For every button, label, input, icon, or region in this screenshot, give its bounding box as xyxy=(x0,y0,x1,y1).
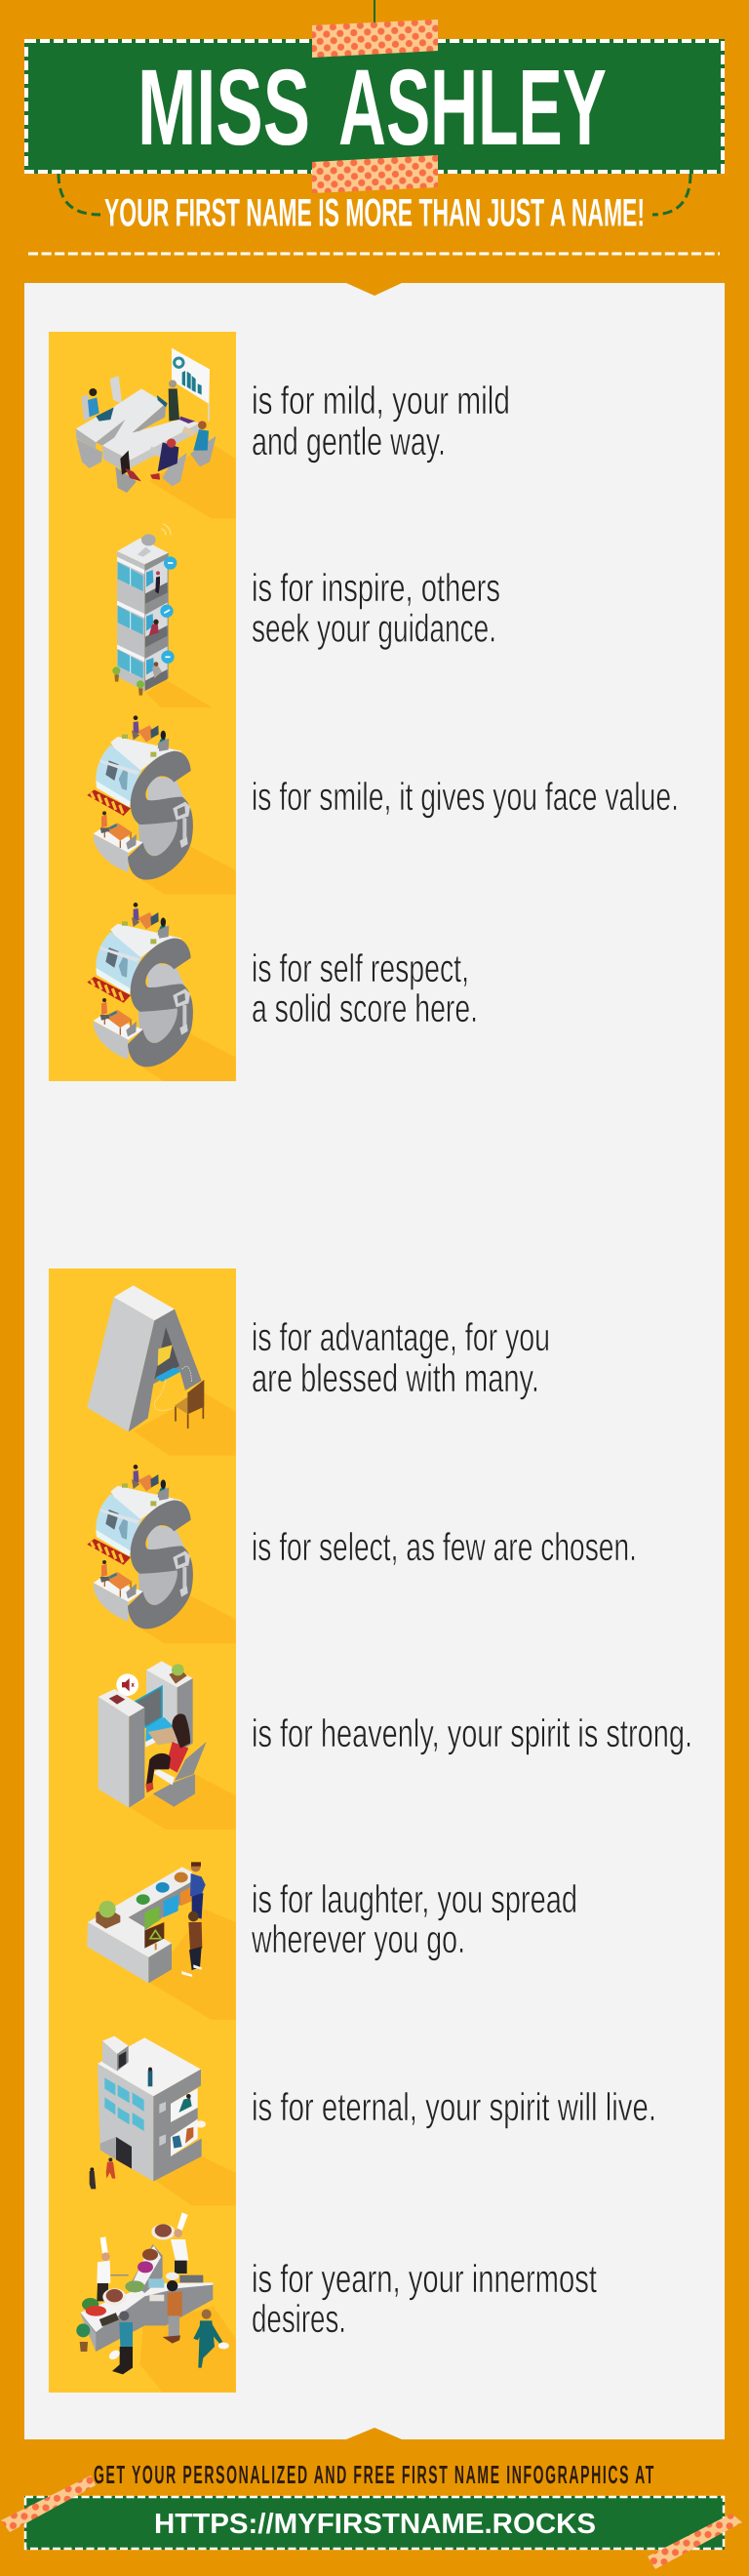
text: L: is for laughter, you spread xyxy=(252,1878,577,1921)
tape top xyxy=(312,20,438,58)
text: Y: is for yearn, your innermost xyxy=(252,2258,597,2301)
text: M xyxy=(252,380,510,463)
title banner xyxy=(24,39,725,174)
text: M: and gentle way. xyxy=(252,421,446,463)
text: L: wherever you go. xyxy=(251,1918,465,1961)
panel: white content xyxy=(24,283,725,2439)
tape left xyxy=(1,2475,96,2532)
icon: letter Y buffet xyxy=(76,2212,236,2393)
icon: letter S office xyxy=(87,715,236,895)
text: A: is for advantage, for you xyxy=(252,1316,550,1359)
icon: letter A workstation xyxy=(87,1285,236,1456)
text: S self respect: a solid score here. xyxy=(252,987,478,1030)
icon: letter L recycling counter xyxy=(87,1862,236,2020)
text: A: are blessed with many. xyxy=(252,1357,539,1400)
title xyxy=(138,48,607,168)
text: M: is for mild, your mild xyxy=(252,380,510,423)
text: S self respect xyxy=(252,947,478,1030)
icon: letter E building xyxy=(90,2036,236,2206)
tape right xyxy=(648,2514,742,2569)
header group xyxy=(24,0,725,254)
tape bottom xyxy=(312,155,438,193)
icon: letter M meeting table xyxy=(76,348,236,519)
right dashed connector xyxy=(652,174,690,215)
text: I xyxy=(252,567,500,650)
footer group xyxy=(1,2460,742,2569)
footer url: HTTPS://MYFIRSTNAME.ROCKS xyxy=(154,2509,596,2540)
icon: letter H desk xyxy=(99,1661,236,1830)
text: Y xyxy=(252,2258,597,2341)
panel: yellow column, first word xyxy=(49,332,236,1081)
footer banner xyxy=(24,2496,725,2550)
hanging line xyxy=(374,0,375,23)
text: A xyxy=(252,1316,550,1400)
text: Y: desires. xyxy=(252,2298,346,2341)
text: L xyxy=(251,1878,577,1961)
text: I: seek your guidance. xyxy=(252,607,496,650)
icon: letter S office third xyxy=(87,1465,236,1643)
text: S self respect: is for self respect, xyxy=(252,947,469,990)
left dashed connector xyxy=(59,174,100,215)
panel: yellow column, second word xyxy=(49,1268,236,2393)
icon: letter S office second xyxy=(87,903,236,1081)
icon: letter I tower xyxy=(112,524,213,707)
dashed rule xyxy=(28,252,720,256)
text: I: is for inspire, others xyxy=(252,567,500,610)
title: MISS xyxy=(138,48,310,168)
